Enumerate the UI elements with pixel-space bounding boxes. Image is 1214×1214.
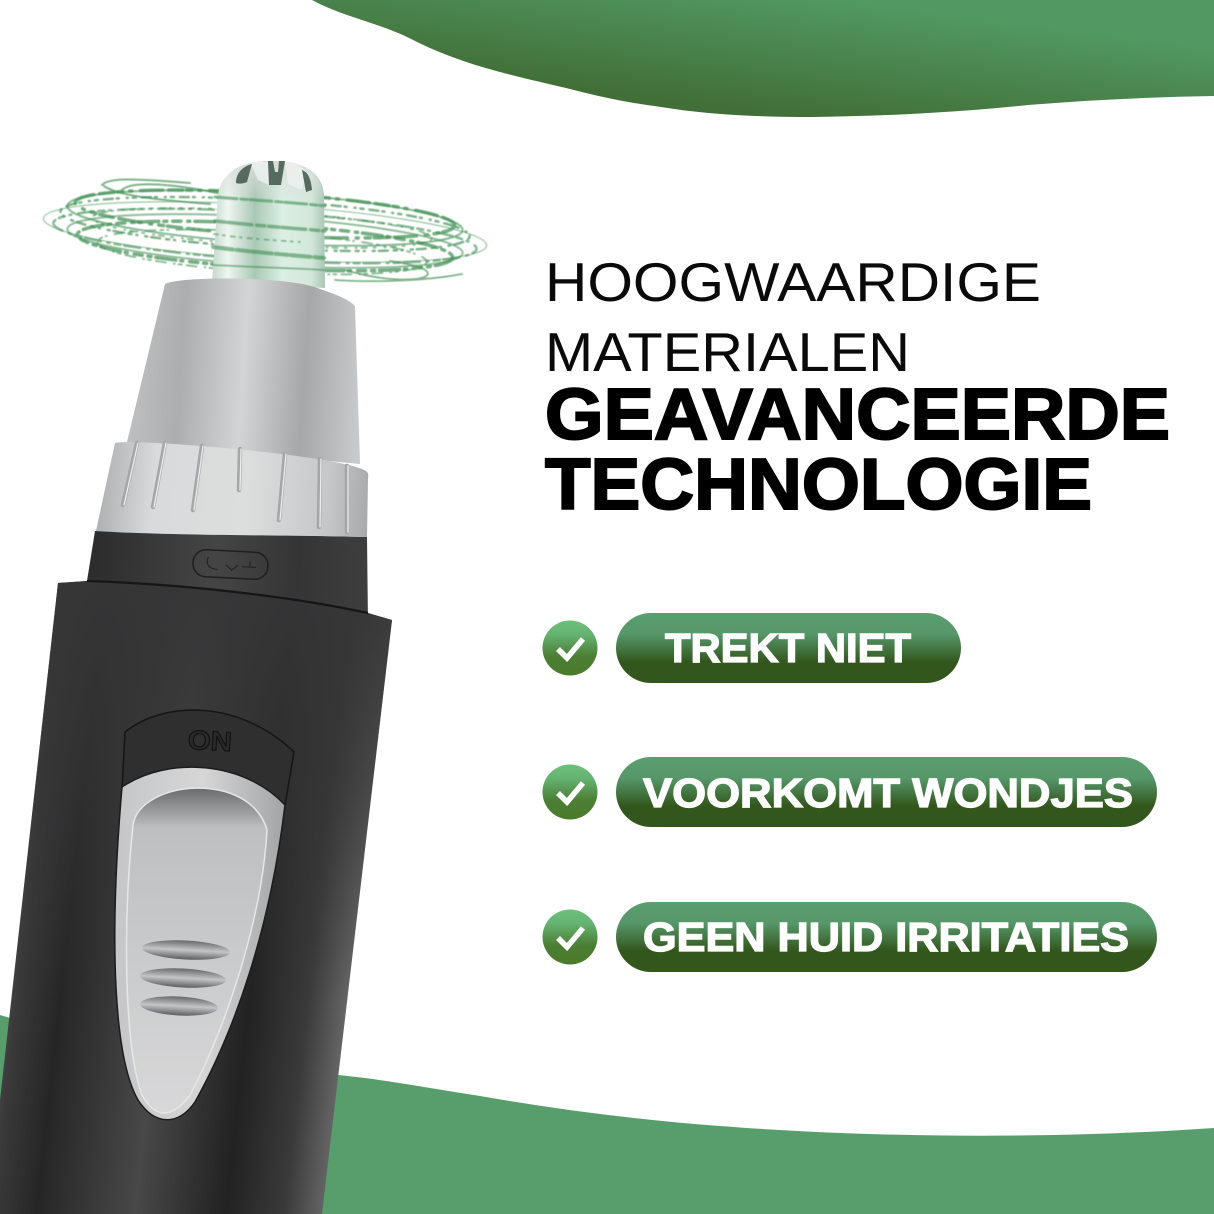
neck badge [192, 549, 269, 580]
knurled silver ring [96, 442, 368, 537]
benefit 1: pill [616, 613, 961, 683]
tip dome shading [218, 161, 324, 200]
benefit 1: check icon [542, 620, 598, 676]
heading: light lines: HOOGWAARDIGE [545, 251, 1041, 313]
silver cone [127, 279, 360, 464]
benefit 3: check icon [542, 910, 598, 964]
benefit 3: pill [616, 902, 1157, 972]
black neck [85, 531, 368, 625]
ON label: ON [187, 725, 233, 757]
benefit 2: check icon [542, 764, 598, 820]
green wave: top [312, 0, 1214, 117]
nose trimmer product [0, 161, 488, 1214]
tip slots [236, 161, 312, 192]
benefit 1: pill: TREKT NIET [665, 625, 911, 671]
heading: bold lines: TECHNOLOGIE [545, 445, 1092, 525]
swirl behind tip [42, 179, 488, 282]
silver slider switch [115, 767, 285, 1120]
green wave: bottom left [0, 1015, 14, 1112]
swirl over tip [213, 197, 325, 270]
green wave: bottom [300, 1072, 1214, 1214]
heading: bold lines: GEAVANCEERDE [545, 375, 1170, 455]
neck groove [87, 581, 368, 613]
body top tone [0, 581, 392, 1214]
heading: light lines: MATERIALEN [545, 321, 910, 383]
grip ridges [140, 938, 230, 1018]
benefit 2: pill [616, 757, 1157, 827]
benefit 2: pill: VOORKOMT WONDJES [643, 770, 1133, 816]
switch recess with ON [122, 710, 294, 805]
body [0, 581, 392, 1214]
heading: bold lines [545, 375, 1170, 525]
heading: light lines [545, 251, 1041, 383]
trimmer tip [212, 161, 325, 288]
benefit 3: pill: GEEN HUID IRRITATIES [643, 914, 1129, 960]
slider face [127, 788, 267, 1113]
